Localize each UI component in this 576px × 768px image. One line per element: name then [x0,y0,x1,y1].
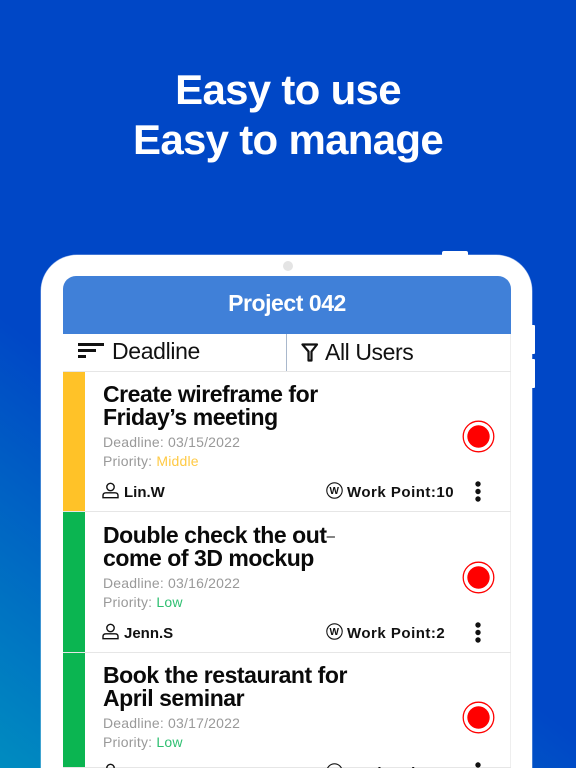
header bar [63,276,511,334]
task 2 work point: W [330,627,340,638]
priority strip [63,371,85,512]
task 2 status [462,562,494,594]
task 3 menu [475,762,481,768]
task 1 title [103,381,318,430]
task 2 title: Double check the out– [103,522,335,548]
task 1 meta: Priority: Middle [103,453,199,469]
filter label: All Users [325,339,413,365]
task 2 title [103,522,335,571]
task 2 [63,512,511,652]
task 2 meta [103,575,240,610]
sort icon [78,343,104,358]
filter icon [301,343,318,362]
task 3 meta: Deadline: 03/17/2022 [103,715,240,731]
sort label: Deadline [112,338,200,364]
task 1 user: Lin.W [124,484,165,501]
tablet device [40,251,535,768]
task 3 meta: Priority: Low [103,734,183,750]
divider [286,334,287,371]
task 2 work point: Work Point:2 [347,625,445,642]
device buttons [442,251,535,388]
task 3 user [106,764,173,768]
heading: Easy to manage [133,116,443,163]
heading: Easy to use [175,66,401,113]
task 3 title: April seminar [103,685,244,711]
priority strip [63,512,85,652]
task 2 title: come of 3D mockup [103,545,314,571]
task 3 work point [327,763,445,768]
task 2 menu [475,622,481,643]
task 3 title [103,662,348,711]
camera [283,261,293,271]
filter bar [63,334,511,371]
task 1 title: Friday’s meeting [103,404,278,430]
task 1 user [102,482,165,501]
task 3 [63,652,511,768]
task 1 work point: Work Point:10 [347,484,454,501]
task 1 title: Create wireframe for [103,381,318,407]
task 1 menu [475,481,481,502]
task 1 status [462,420,494,452]
task 2 user [102,624,173,642]
task 1 meta [103,434,240,469]
task 1 meta: Deadline: 03/15/2022 [103,434,240,450]
task 2 meta: Deadline: 03/16/2022 [103,575,240,591]
task 3 title: Book the restaurant for [103,662,347,688]
header bar: Project 042 [228,290,346,316]
task 3 meta [103,715,240,750]
task 3 status [462,702,494,734]
task 1 work point: W [330,486,340,497]
task 2 meta: Priority: Low [103,594,183,610]
task 2 user: Jenn.S [124,625,173,642]
task 1 [63,371,511,512]
priority strip [63,652,85,768]
heading [133,66,443,163]
tablet body [41,255,532,768]
